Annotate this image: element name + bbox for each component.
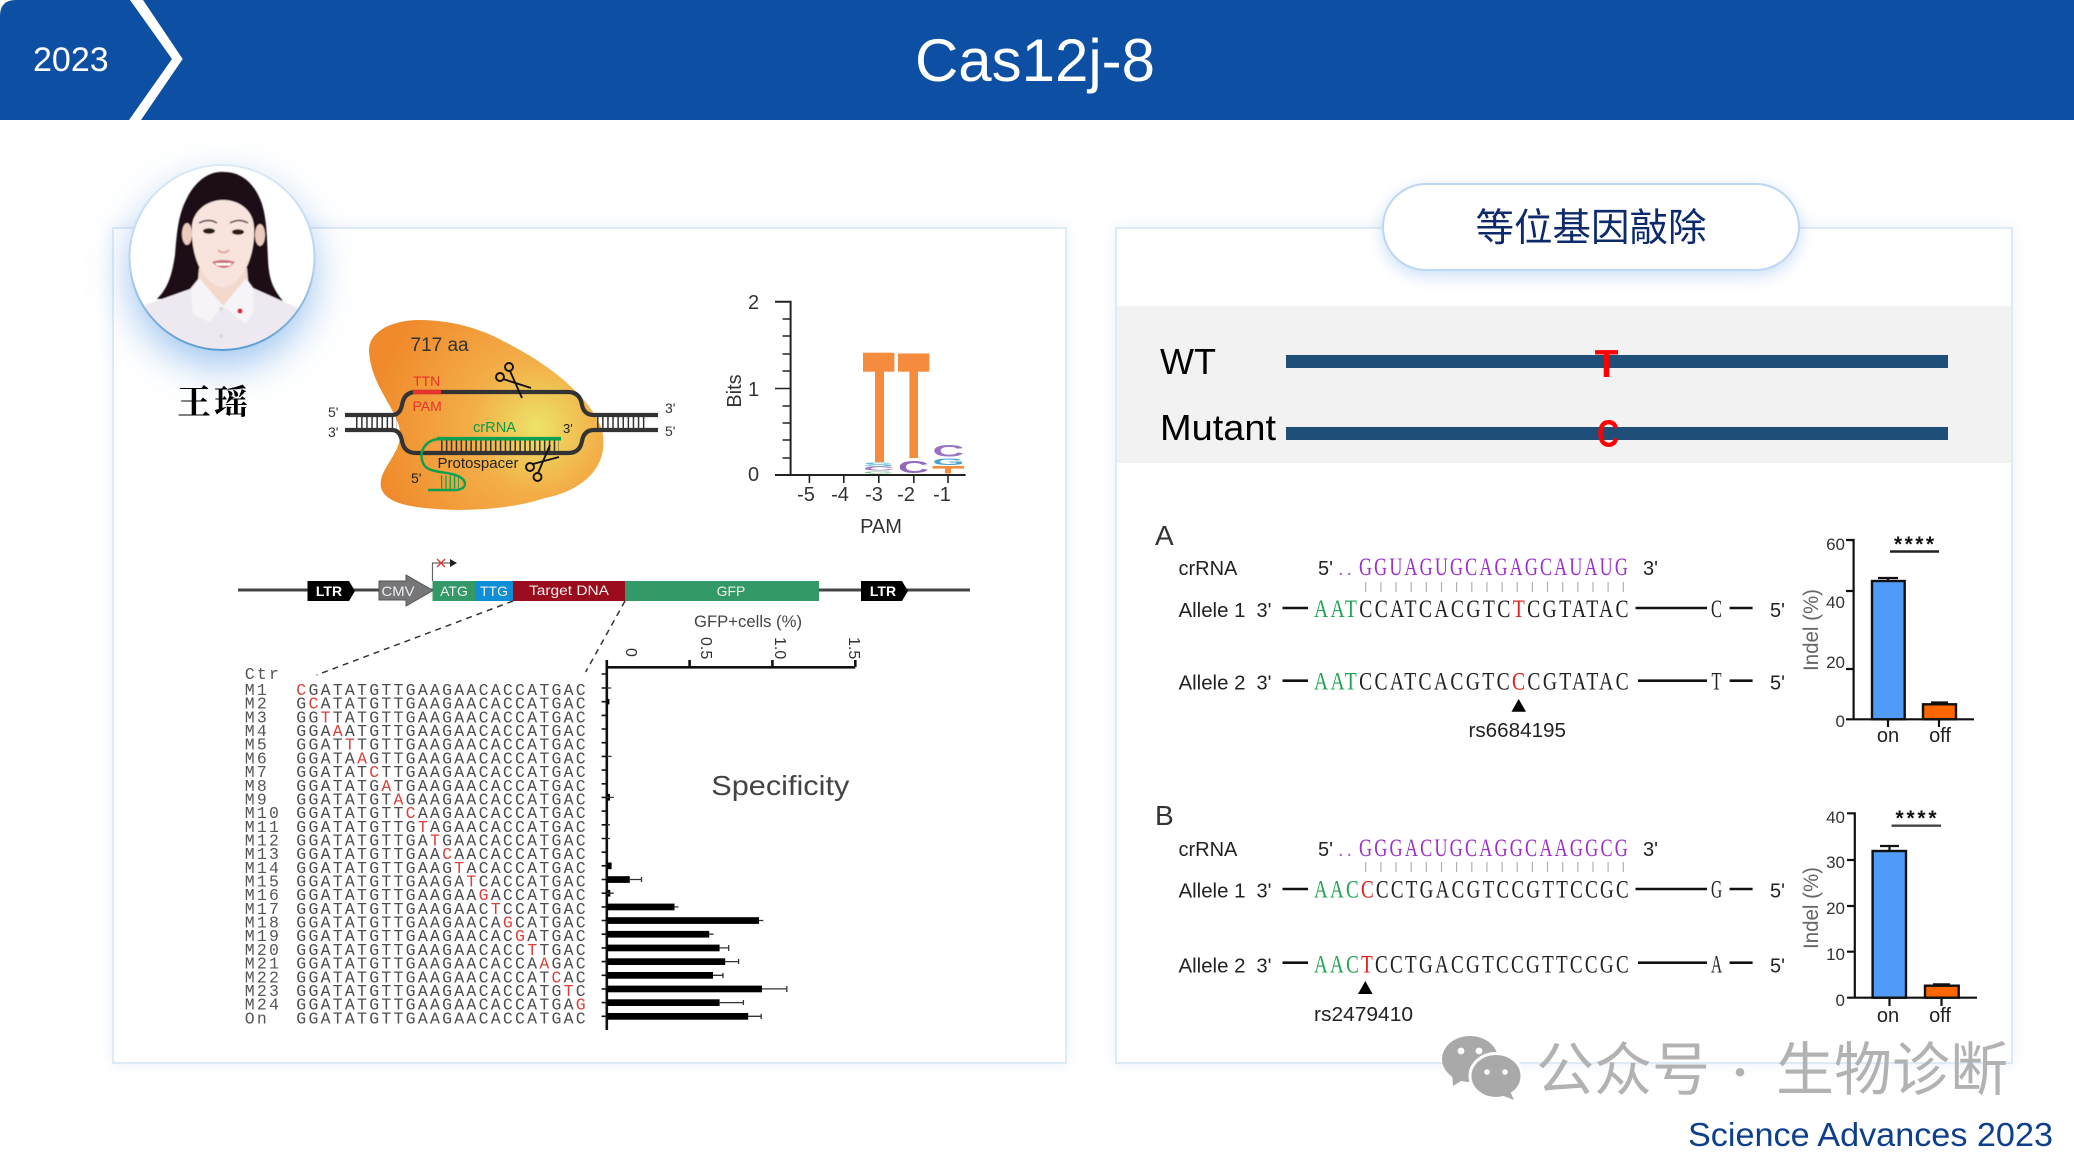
chart: PAM sequence logo: -3 [865, 484, 883, 506]
watermark: WeChat official account [1442, 1023, 2008, 1107]
panel A: rs6684195 allele alignment: A [1155, 520, 1174, 551]
watermark: WeChat official account: 公众号 [1536, 1023, 1710, 1107]
sequence list: mismatched target sequences: GCATATGTTGAAGAACACCATGAC [296, 695, 588, 714]
diagram: reporter construct: Target DNA [529, 583, 609, 598]
panel B: rs2479410 allele alignment: AACTCCTGACGTCCGTTCCGC [1314, 952, 1631, 978]
chart B: indel percent on vs off: 40 [1826, 808, 1845, 827]
diagram: Cas12j R-loop on orange protein: 5' [411, 470, 421, 486]
sequence list: mismatched target sequences: M14 [245, 859, 281, 878]
panel B: rs2479410 allele alignment: 3' [1256, 880, 1271, 902]
sequence list: mismatched target sequences: M17 [245, 900, 281, 919]
WT and Mutant strands: Mutant [1160, 407, 1276, 448]
sequence list: mismatched target sequences: GGATATGTTGAAGAAGACCATGAC [296, 886, 588, 905]
sequence list: mismatched target sequences: GGATTTGTTGAAGAACACCATGAC [296, 736, 588, 755]
band: WT and mutant strip background [1117, 306, 2011, 463]
panel B: rs2479410 allele alignment: crRNA [1178, 839, 1238, 861]
sequence list: mismatched target sequences: GGATATCTTGAAGAACACCATGAC [296, 763, 588, 782]
chart: PAM sequence logo: -4 [831, 484, 849, 506]
panel B: rs2479410 allele alignment: G [1711, 876, 1724, 904]
sequence list: mismatched target sequences: GGATATGTTGAAGAACACGATGAC [296, 927, 588, 946]
chart: PAM sequence logo: 1 [748, 379, 759, 401]
sequence list: mismatched target sequences: M8 [245, 777, 269, 796]
diagram: reporter construct: LTR [870, 583, 896, 599]
diagram: Cas12j R-loop on orange protein: Protospacer [438, 455, 519, 472]
WT and Mutant strands: WT [1160, 341, 1216, 382]
sequence list: mismatched target sequences: GGATATGTTGAAGAACTCCATGAC [296, 900, 588, 919]
sequence list: mismatched target sequences: M13 [245, 845, 281, 864]
sequence list: mismatched target sequences: GGATATGTTGAAGAACACCATGTC [296, 982, 588, 1001]
panel B: rs2479410 allele alignment: AACCCCTGACGTCCGTTCCGC [1314, 876, 1631, 904]
sequence list: mismatched target sequences: GGATATGTTGAAGAACACCAAGAC [296, 955, 588, 974]
chart: GFP+ cells specificity bars: GFP+cells (%) [694, 612, 802, 631]
portrait glow [130, 166, 314, 350]
header bar [0, 0, 2074, 120]
portrait photo [130, 165, 314, 360]
name: 王瑶 [177, 375, 251, 424]
sequence list: mismatched target sequences: GGATATGTTGAACAACACCATGAC [296, 845, 588, 864]
chart: PAM sequence logo: C [898, 457, 929, 477]
panel A: rs6684195 allele alignment: 3' [1643, 558, 1658, 580]
heading pill: allele knockout [1382, 183, 1800, 271]
sequence list: mismatched target sequences: GGATATGTTCAAGAACACCATGAC [296, 804, 588, 823]
chart: PAM sequence logo: C [863, 466, 895, 472]
panel B: rs2479410 allele alignment: A [1711, 952, 1724, 978]
watermark: WeChat official account: 生物诊断 [1776, 1023, 2008, 1107]
sequence list: mismatched target sequences: M18 [245, 914, 281, 932]
diagram: Cas12j R-loop on orange protein [328, 320, 675, 510]
sequence list: mismatched target sequences: M20 [245, 941, 281, 960]
panel B: rs2479410 allele alignment: Allele 2 [1178, 956, 1246, 978]
sequence list: mismatched target sequences: M4 [245, 722, 269, 741]
sequence list: mismatched target sequences: M10 [245, 804, 281, 823]
chart: GFP+ cells specificity bars: 0 [622, 648, 639, 657]
sequence list: mismatched target sequences: GGATATGTAGAAGAACACCATGAC [296, 790, 588, 809]
sequence list: mismatched target sequences: GGAAATGTTGAAGAACACCATGAC [296, 722, 588, 741]
diagram: Cas12j R-loop on orange protein: crRNA [473, 419, 516, 436]
panel A: rs6684195 allele alignment: rs6684195 [1468, 720, 1566, 742]
panel A: rs6684195 allele alignment: 5' [1770, 600, 1785, 622]
sequence list: mismatched target sequences: M15 [245, 872, 281, 892]
chart A: indel percent on vs off: 60 [1826, 535, 1845, 554]
sequence list: mismatched target sequences: M12 [245, 832, 281, 850]
diagram: Cas12j R-loop on orange protein: 5' [665, 423, 675, 439]
diagram: Cas12j R-loop on orange protein: 5' [328, 404, 338, 420]
chart B: indel percent on vs off: 30 [1826, 853, 1845, 872]
chart B: indel percent on vs off [1800, 807, 1977, 1027]
chart B: indel percent on vs off: 20 [1826, 899, 1845, 918]
chart: GFP+ cells specificity bars: 1.5 [845, 637, 862, 659]
header bar: Cas12j-8 [915, 27, 1155, 94]
panel A: rs6684195 allele alignment: Allele 1 [1178, 600, 1246, 622]
diagram: Cas12j R-loop on orange protein: PAM [412, 398, 442, 414]
sequence list: mismatched target sequences: M23 [245, 982, 281, 1001]
panel B: rs2479410 allele alignment: rs2479410 [1314, 1004, 1413, 1026]
sequence list: mismatched target sequences: M16 [245, 886, 281, 905]
panel B: rs2479410 allele alignment: 5' [1318, 839, 1333, 861]
panel B: rs2479410 allele alignment: Allele 1 [1178, 880, 1246, 902]
sequence list: mismatched target sequences: On [245, 1009, 269, 1028]
sequence list: mismatched target sequences: M7 [245, 763, 269, 782]
WT and Mutant strands: T [1595, 343, 1619, 386]
chart A: indel percent on vs off: **** [1894, 533, 1935, 556]
chart: PAM sequence logo: 0 [748, 464, 759, 486]
diagram: reporter construct: TTG [480, 583, 508, 599]
chart: GFP+ cells specificity bars [602, 612, 862, 1030]
panel A: rs6684195 allele alignment: Allele 2 [1178, 672, 1246, 694]
chart: PAM sequence logo: S [863, 462, 894, 468]
chart: PAM sequence logo: -5 [797, 484, 815, 506]
sequence list: mismatched target sequences: GGATATGATGAAGAACACCATGAC [296, 777, 588, 796]
diagram: Cas12j R-loop on orange protein: 717 aa [410, 335, 469, 356]
sequence list: mismatched target sequences: Ctr [245, 665, 281, 684]
citation: Science Advances 2023 [1688, 1116, 2053, 1152]
panel: left Cas12j-8 characterisation [112, 227, 1067, 1064]
sequence list: mismatched target sequences: GGTTATGTTGAAGAACACCATGAC [296, 708, 588, 727]
chart A: indel percent on vs off: on [1877, 725, 1899, 747]
diagram: Cas12j R-loop on orange protein: 3' [665, 400, 675, 416]
chart A: indel percent on vs off: 20 [1826, 653, 1845, 672]
sequence list: mismatched target sequences: GGATATGTTGAAGAACACCATCAC [296, 968, 588, 987]
panel A: rs6684195 allele alignment: .. [1338, 558, 1355, 580]
panel B: rs2479410 allele alignment: .. [1338, 839, 1355, 861]
header bar: 2023 [33, 41, 109, 79]
chart: PAM sequence logo: -1 [933, 484, 951, 506]
panel B: rs2479410 allele alignment: 5' [1770, 880, 1785, 902]
sequence list: mismatched target sequences [245, 665, 588, 1028]
sequence list: mismatched target sequences: M24 [245, 996, 281, 1015]
panel A: rs6684195 allele alignment: 3' [1256, 672, 1271, 694]
chart A: indel percent on vs off: 40 [1826, 593, 1845, 612]
sequence list: mismatched target sequences: M22 [245, 968, 281, 987]
sequence list: mismatched target sequences: GGATATGTTGAAGATCACCATGAC [296, 872, 588, 892]
diagram: Cas12j R-loop on orange protein: 3' [563, 421, 573, 436]
diagram: reporter construct: CMV [382, 583, 415, 599]
panel B: rs2479410 allele alignment [1155, 800, 1785, 1026]
heading pill: allele knockout: 等位基因敲除 [1475, 207, 1706, 250]
chart B: indel percent on vs off: 10 [1826, 945, 1845, 964]
chart: PAM sequence logo: PAM [860, 516, 902, 538]
panel A: rs6684195 allele alignment: AATCCATCACGTCCCGTATAC [1314, 668, 1631, 696]
sequence list: mismatched target sequences: GGATATGTTGTAGAACACCATGAC [296, 818, 588, 837]
chart B: indel percent on vs off: off [1929, 1005, 1951, 1027]
chart: PAM sequence logo: 2 [748, 292, 759, 314]
chart: PAM sequence logo [724, 292, 966, 538]
WT and Mutant strands [1160, 341, 1948, 456]
chart A: indel percent on vs off: 0 [1836, 712, 1845, 731]
chart: PAM sequence logo: G [932, 457, 964, 467]
panel A: rs6684195 allele alignment: GGUAGUGCAGAGCAUAUG [1359, 554, 1630, 581]
panel A: rs6684195 allele alignment: 5' [1318, 558, 1333, 580]
panel A: rs6684195 allele alignment: crRNA [1178, 558, 1238, 580]
diagram: Cas12j R-loop on orange protein: 3' [328, 424, 338, 440]
diagram: reporter construct: GFP [717, 583, 745, 599]
chart A: indel percent on vs off: off [1929, 725, 1951, 747]
sequence list: mismatched target sequences: M21 [245, 955, 281, 974]
sequence list: mismatched target sequences: M11 [245, 818, 281, 837]
panel A: rs6684195 allele alignment: 3' [1256, 600, 1271, 622]
chart: GFP+ cells specificity bars: 1.0 [771, 637, 788, 659]
chart: PAM sequence logo: C [932, 442, 964, 461]
chart: GFP+ cells specificity bars: Specificity [711, 770, 849, 801]
sequence list: mismatched target sequences: M3 [245, 708, 269, 727]
chart: PAM sequence logo: G [863, 471, 894, 474]
panel B: rs2479410 allele alignment: 3' [1643, 839, 1658, 861]
sequence list: mismatched target sequences: M19 [245, 927, 281, 946]
chart B: indel percent on vs off: 0 [1836, 991, 1845, 1010]
chart: GFP+ cells specificity bars: 0.5 [697, 637, 714, 659]
sequence list: mismatched target sequences: GGATATGTTGAAGTACACCATGAC [296, 859, 588, 878]
chart: PAM sequence logo: -2 [897, 484, 915, 506]
diagram: reporter construct: LTR [316, 583, 342, 599]
chart A: indel percent on vs off: Indel (%) [1800, 589, 1823, 671]
panel A: rs6684195 allele alignment: 5' [1770, 672, 1785, 694]
panel B: rs2479410 allele alignment: B [1155, 800, 1174, 831]
chart B: indel percent on vs off: **** [1896, 807, 1937, 830]
sequence list: mismatched target sequences: GGATATGTTGAAGAACACCATGAG [296, 996, 588, 1015]
watermark: WeChat official account: · [1720, 1041, 1760, 1099]
sequence list: mismatched target sequences: GGATATGTTGAAGAACACCATGAC [296, 1009, 588, 1028]
panel A: rs6684195 allele alignment [1155, 520, 1785, 742]
panel A: rs6684195 allele alignment: AATCCATCACGTCTCGTATAC [1314, 596, 1631, 623]
panel B: rs2479410 allele alignment: GGGACUGCAGGCAAGGCG [1359, 835, 1630, 862]
panel A: rs6684195 allele alignment: T [1712, 668, 1724, 696]
sequence list: mismatched target sequences: M9 [245, 790, 269, 809]
sequence list: mismatched target sequences: M2 [245, 695, 269, 714]
WT and Mutant strands: C [1597, 414, 1619, 456]
diagram: Cas12j R-loop on orange protein: TTN [413, 373, 440, 389]
sequence list: mismatched target sequences: CGATATGTTGAAGAACACCATGAC [296, 681, 588, 700]
sequence list: mismatched target sequences: M5 [245, 736, 269, 755]
sequence list: mismatched target sequences: GGATATGTTGAAGAACACCTTGAC [296, 941, 588, 960]
panel B: rs2479410 allele alignment: 5' [1770, 956, 1785, 978]
diagram: reporter construct [238, 559, 970, 675]
chart: PAM sequence logo: Bits [724, 374, 746, 408]
panel: right allele knockout [1115, 227, 2013, 1064]
sequence list: mismatched target sequences: GGATATGTTGATGAACACCATGAC [296, 832, 588, 850]
chart B: indel percent on vs off: Indel (%) [1800, 867, 1823, 949]
panel A: rs6684195 allele alignment: C [1711, 596, 1724, 623]
sequence list: mismatched target sequences: M6 [245, 749, 269, 768]
panel B: rs2479410 allele alignment: 3' [1256, 956, 1271, 978]
sequence list: mismatched target sequences: GGATATGTTGAAGAACAGCATGAC [296, 914, 588, 932]
sequence list: mismatched target sequences: M1 [245, 681, 269, 700]
chart A: indel percent on vs off [1800, 533, 1974, 747]
sequence list: mismatched target sequences: GGATAAGTTGAAGAACACCATGAC [296, 749, 588, 768]
chart B: indel percent on vs off: on [1877, 1005, 1899, 1027]
diagram: reporter construct: ATG [440, 583, 468, 599]
